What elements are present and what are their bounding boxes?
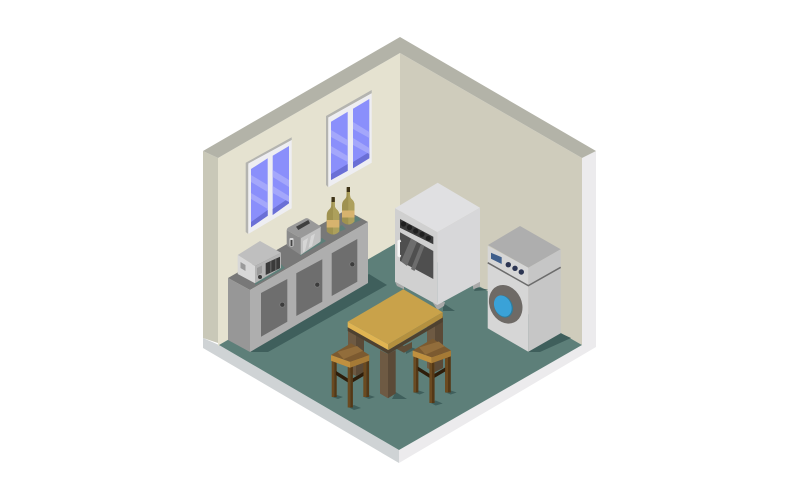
right leg xyxy=(435,316,443,372)
toaster top xyxy=(287,218,321,238)
door knobs xyxy=(280,262,355,307)
oven xyxy=(395,183,489,311)
bottle left xyxy=(327,197,346,234)
cabinet top xyxy=(228,210,368,290)
stool right xyxy=(413,339,457,406)
door 3 xyxy=(332,239,357,296)
washer front xyxy=(488,246,528,352)
cabinet side xyxy=(228,278,250,352)
wall top rim xyxy=(203,37,596,158)
cabinet xyxy=(228,210,387,352)
oven knobs xyxy=(401,221,431,241)
washer right side xyxy=(528,249,561,352)
stool left xyxy=(331,343,375,410)
washing machine xyxy=(483,226,571,352)
table underside xyxy=(348,318,443,354)
table top xyxy=(348,289,443,344)
bottles xyxy=(327,187,361,234)
toaster xyxy=(287,218,326,256)
floor xyxy=(219,241,582,450)
oven right side xyxy=(437,208,480,305)
oven window xyxy=(400,232,433,279)
back leg xyxy=(395,342,412,353)
floor slab left face xyxy=(203,338,399,463)
oven front xyxy=(395,208,437,305)
door 2 xyxy=(296,259,322,316)
oven control panel xyxy=(400,219,433,244)
front leg xyxy=(380,350,388,398)
cabinet shadow xyxy=(250,274,387,352)
washer knobs xyxy=(506,262,524,275)
table xyxy=(348,289,443,399)
washer door xyxy=(483,279,529,329)
bottle right xyxy=(342,187,361,224)
toaster side xyxy=(301,227,321,255)
washer display xyxy=(491,253,502,264)
room shell xyxy=(203,37,596,463)
cabinet front xyxy=(250,222,368,352)
table shadows xyxy=(392,392,407,399)
left wall end face xyxy=(203,151,218,343)
floor slab and right wall end face xyxy=(399,151,596,463)
washer top xyxy=(488,226,561,268)
washer shadow xyxy=(528,333,571,352)
oven shadows and feet xyxy=(443,303,455,311)
window left xyxy=(246,137,292,234)
left leg xyxy=(348,327,356,376)
microwave xyxy=(238,241,285,285)
left wall xyxy=(218,53,400,346)
door 1 xyxy=(261,279,287,337)
washer divider line xyxy=(488,263,561,286)
oven handle xyxy=(399,240,401,256)
toaster end xyxy=(287,230,301,255)
right wall xyxy=(400,53,582,345)
oven top xyxy=(395,183,480,232)
window right xyxy=(326,90,372,187)
